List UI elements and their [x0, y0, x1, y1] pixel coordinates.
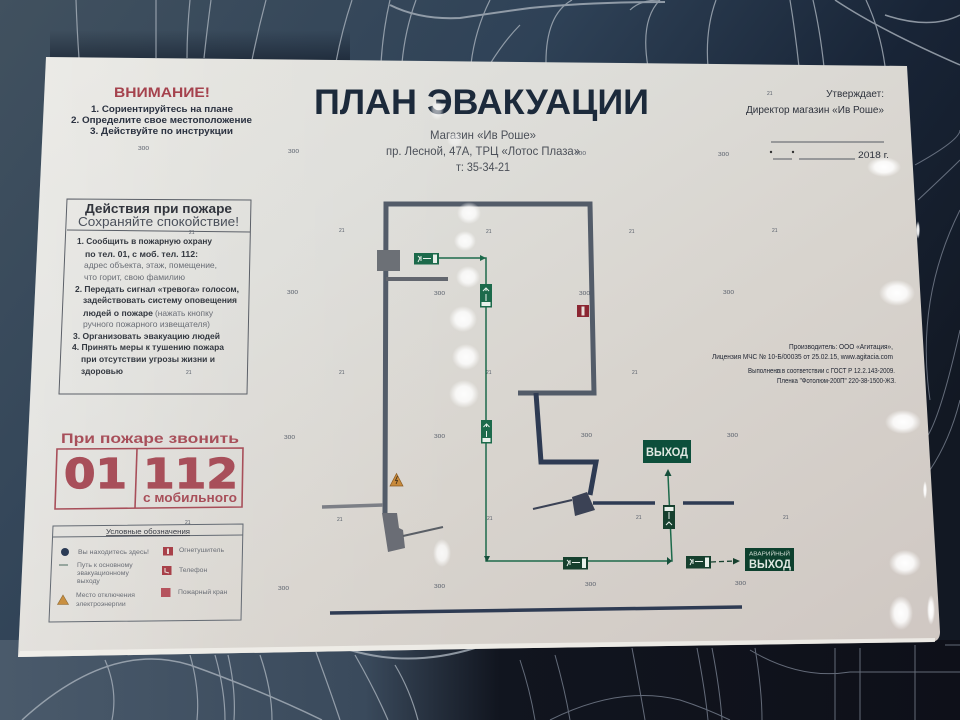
emergency exit sign: АВАРИЙНЫЙ ВЫХОД: АВАРИЙНЫЙ — [749, 550, 790, 558]
tiny grid marks: 21 — [632, 370, 638, 376]
tiny grid marks: 300 — [434, 434, 445, 440]
legend: fire hydrant — [161, 588, 228, 597]
tiny grid marks: 300 — [138, 146, 149, 152]
action list: людей о пожаре — [83, 308, 153, 318]
panel: fire phone numbers — [55, 430, 243, 509]
legend: exit route: Путь к основному — [77, 562, 133, 569]
legend: power cut-off: Место отключения — [76, 592, 135, 599]
approval block — [746, 89, 889, 160]
action list: задействовать систему оповещения — [83, 295, 237, 305]
address block: т: 35-34-21 — [456, 160, 510, 174]
tiny grid marks: 21 — [487, 516, 493, 522]
floor plan walls — [322, 204, 742, 613]
exit sign 5 — [663, 505, 675, 529]
legend: you are here: Вы находитесь здесь! — [78, 549, 149, 556]
tiny grid marks: 21 — [339, 370, 345, 376]
manufacturer details — [712, 342, 896, 385]
tiny grid marks: 21 — [636, 515, 642, 521]
attention steps: 2. Определите свое местоположение — [71, 115, 252, 126]
legend: extinguisher: Огнетушитель — [179, 547, 224, 554]
legend: exit route: выходу — [77, 578, 100, 585]
number 112: 112 — [143, 450, 238, 498]
tiny grid marks: 21 — [185, 520, 191, 526]
action list: 2. Передать сигнал «тревога» голосом, — [75, 284, 239, 294]
legend: extinguisher — [163, 547, 224, 556]
manufacturer details: Производитель: ООО «Агитация», — [789, 342, 893, 351]
mobile caption: с мобильного — [143, 490, 237, 505]
panel subheading: Сохраняйте спокойствие! — [78, 214, 239, 229]
legend: you are here — [61, 548, 149, 556]
tiny grid marks: 300 — [718, 152, 729, 158]
central door leaf — [533, 500, 572, 509]
tiny grid marks: 300 — [278, 586, 289, 592]
arrowhead: route right — [667, 557, 672, 565]
action list: 1. Сообщить в пожарную охрану — [77, 236, 212, 246]
central column — [572, 492, 595, 516]
action list: 3. Организовать эвакуацию людей — [73, 331, 220, 341]
tiny grid marks: 21 — [629, 229, 635, 235]
exit sign 1 — [414, 253, 439, 264]
approval block: Директор магазин «Ив Роше» — [746, 105, 884, 116]
green evacuation route — [438, 255, 672, 565]
panel: legend — [49, 524, 243, 622]
tiny grid marks: 21 — [486, 370, 492, 376]
legend heading: Условные обозначения — [106, 527, 190, 536]
legend: exit route — [59, 562, 133, 585]
legend: power cut-off — [58, 592, 135, 608]
tiny grid marks: 300 — [723, 290, 734, 296]
attention heading: ВНИМАНИЕ! — [114, 84, 210, 100]
tiny grid marks: 300 — [434, 584, 445, 590]
tiny grid marks: 300 — [735, 581, 746, 587]
arrowhead: route turn — [480, 255, 486, 261]
title: ПЛАН ЭВАКУАЦИИ — [314, 83, 649, 122]
action list: при отсутствии угрозы жизни и — [81, 354, 215, 364]
tiny grid marks: 300 — [434, 291, 445, 297]
address block: пр. Лесной, 47А, ТРЦ «Лотос Плаза» — [386, 144, 580, 158]
legend: exit route: эвакуационному — [77, 570, 129, 577]
glossy reflections — [430, 100, 935, 630]
tiny grid marks: 300 — [284, 435, 295, 441]
phone heading: При пожаре звонить — [61, 430, 239, 446]
tiny grid marks: 21 — [337, 517, 343, 523]
manufacturer details: Выполнено в соответствии с ГОСТ Р 12.2.143-2009. — [748, 366, 895, 375]
electrical hazard triangle — [390, 474, 403, 486]
approval block: 2018 г. — [858, 150, 889, 160]
address block: Магазин «Ив Роше» — [430, 128, 536, 142]
tiny grid marks: 21 — [486, 229, 492, 235]
tiny grid marks — [138, 91, 789, 592]
inner wall stub — [386, 277, 448, 281]
attention steps: 3. Действуйте по инструкции — [90, 126, 233, 137]
attention steps — [71, 104, 252, 137]
legend: power cut-off: электроэнергии — [76, 601, 126, 608]
arrowhead: exit up — [664, 469, 672, 476]
tiny grid marks: 21 — [776, 369, 782, 375]
upper hall walls — [385, 204, 594, 513]
tiny grid marks: 21 — [783, 515, 789, 521]
emergency exit sign: АВАРИЙНЫЙ ВЫХОД — [745, 548, 794, 571]
legend: telephone: Телефон — [179, 567, 207, 574]
action list: по тел. 01, с моб. тел. 112: — [85, 249, 198, 259]
tiny grid marks: 300 — [288, 149, 299, 155]
action list: ручного пожарного извещателя) — [83, 319, 210, 329]
tiny grid marks: 300 — [585, 582, 596, 588]
tiny grid marks: 21 — [189, 230, 195, 236]
exit sign: ВЫХОД — [643, 440, 691, 463]
attention steps: 1. Сориентируйтесь на плане — [91, 104, 233, 115]
exit sign 6 with dashed arrow — [686, 556, 740, 568]
manufacturer details: Лицензия МЧС № 10-Б/00035 от 25.02.15, www.agitacia.com — [712, 352, 893, 361]
manufacturer details: Пленка "Фотолюм-200П" 220-38-1500-ЖЗ. — [777, 376, 896, 385]
tiny grid marks: 300 — [575, 151, 586, 157]
left wall stub — [322, 505, 383, 507]
address block — [386, 128, 580, 174]
attention block — [71, 84, 252, 137]
panel: actions in case of fire — [59, 199, 251, 394]
approval block: Утверждает: — [826, 89, 884, 100]
panel heading: Действия при пожаре — [85, 201, 232, 216]
tiny grid marks: 21 — [186, 370, 192, 376]
action list: 4. Принять меры к тушению пожара — [72, 342, 224, 352]
action list: (нажать кнопку — [155, 308, 214, 318]
exit sign 3 — [481, 420, 492, 444]
tiny grid marks: 300 — [581, 433, 592, 439]
exit sign 4 — [563, 557, 588, 570]
action list: что горит, свою фамилию — [84, 272, 186, 282]
lower-left door leaf — [403, 527, 443, 536]
grey column — [377, 250, 400, 271]
number 01: 01 — [64, 450, 127, 498]
tiny grid marks: 300 — [727, 433, 738, 439]
lower wall segments — [593, 501, 734, 505]
bottom wall — [330, 607, 742, 613]
lower-left column — [382, 513, 405, 552]
tiny grid marks: 300 — [287, 290, 298, 296]
tiny grid marks: 300 — [579, 291, 590, 297]
tiny grid marks: 21 — [339, 228, 345, 234]
tiny grid marks: 21 — [772, 228, 778, 234]
legend: telephone — [162, 566, 207, 575]
exit sign 2 — [480, 284, 492, 308]
legend: fire hydrant: Пожарный кран — [178, 588, 228, 596]
action list: адрес объекта, этаж, помещение, — [84, 260, 217, 270]
arrowhead: route down — [484, 556, 490, 562]
tiny grid marks: 21 — [767, 91, 773, 97]
action list — [72, 236, 239, 376]
action list: здоровью — [81, 366, 123, 376]
exit sign: ВЫХОД: ВЫХОД — [646, 447, 688, 459]
central dark wall — [536, 393, 596, 495]
fire extinguisher icon — [577, 305, 589, 317]
emergency exit sign: АВАРИЙНЫЙ ВЫХОД: ВЫХОД — [749, 557, 791, 571]
